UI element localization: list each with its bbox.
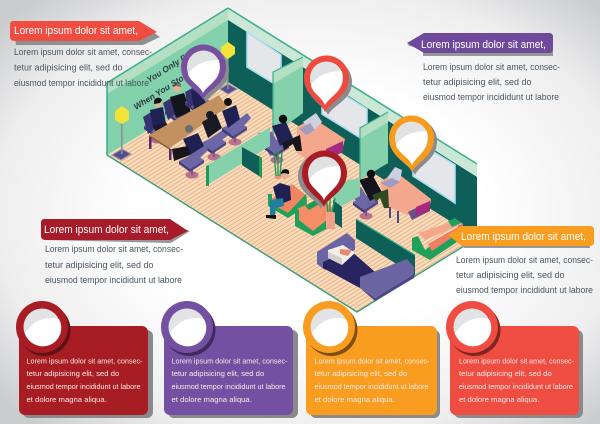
panel: dark red card	[16, 301, 153, 418]
body text: eiusmod tempor incididunt ut labore	[456, 285, 593, 295]
icon: coral ring	[446, 301, 500, 356]
card text	[26, 356, 143, 404]
card text: tetur adipisicing elit, sed do	[459, 369, 552, 378]
banner purple	[407, 33, 553, 56]
plant one	[274, 150, 282, 179]
body text: eiusmod tempor incididunt ut labore	[14, 78, 149, 88]
meeting group front row	[172, 98, 251, 178]
banner red	[10, 21, 160, 45]
callout: top left	[10, 21, 160, 88]
card text	[314, 356, 430, 404]
callout: middle right	[448, 226, 594, 295]
callout: top right	[407, 33, 560, 102]
card text: eiusmod tempor incididunt ut labore	[459, 382, 573, 391]
body text: eiusmod tempor incididunt ut labore	[45, 275, 182, 285]
banner dark red: Lorem ipsum dolor sit amet,	[44, 224, 169, 236]
body text	[45, 244, 183, 285]
partition 2	[360, 112, 388, 180]
body text: eiusmod tempor incididunt ut labore	[423, 92, 559, 102]
slanted slogan text	[132, 47, 196, 112]
desk 1 with laptop	[297, 113, 345, 163]
card text: tetur adipisicing elit, sed do	[172, 369, 264, 378]
map pin purple	[181, 45, 229, 103]
back wall	[228, 8, 477, 238]
card text: Lorem ipsum dolor sit amet, consec-	[314, 356, 430, 366]
worker chair and person 2	[347, 170, 389, 220]
card text: Lorem ipsum dolor sit amet, consec-	[459, 356, 574, 366]
armchair with seated visitor	[266, 169, 307, 219]
card text: et dolore magna aliqua.	[26, 395, 107, 404]
panel: purple card	[161, 301, 298, 418]
map pin dark red	[298, 150, 347, 209]
panel: coral card	[446, 301, 583, 418]
panel: orange card	[303, 301, 440, 418]
body text	[456, 255, 593, 295]
low partition left	[206, 127, 270, 186]
desk 2 with laptop	[380, 167, 431, 223]
body text	[14, 47, 152, 88]
floor lamp back	[220, 42, 237, 94]
floor edge	[107, 155, 477, 312]
banner red: Lorem ipsum dolor sit amet,	[14, 25, 138, 37]
coffee table with book	[328, 245, 355, 265]
body text: tetur adipisicing elit, sed do	[423, 77, 532, 87]
card text: et dolore magna aliqua.	[314, 395, 395, 404]
card text	[172, 356, 288, 404]
slanted slogan text: When You Stop	[132, 70, 190, 112]
isometric office room	[107, 8, 477, 312]
card text: tetur adipisicing elit, sed do	[314, 369, 407, 378]
body text: Lorem ipsum dolor sit amet, consec-	[423, 62, 560, 72]
card text: tetur adipisicing elit, sed do	[26, 369, 119, 378]
left wall	[107, 8, 228, 155]
map pin red	[304, 56, 352, 115]
card text: eiusmod tempor incididunt ut labore	[26, 382, 140, 391]
icon: dark red ring	[16, 301, 70, 356]
banner purple: Lorem ipsum dolor sit amet,	[421, 39, 546, 51]
slanted slogan text: You Only Fail	[145, 47, 196, 85]
card text: et dolore magna aliqua.	[459, 395, 539, 404]
card text: Lorem ipsum dolor sit amet, consec-	[172, 356, 288, 366]
banner orange	[448, 226, 594, 248]
floor lamp left	[112, 106, 131, 160]
body text: tetur adipisicing elit, sed do	[45, 260, 154, 270]
corner sofa right	[412, 218, 463, 260]
banner orange: Lorem ipsum dolor sit amet,	[461, 231, 586, 243]
lounge sofa	[317, 233, 414, 301]
body text: tetur adipisicing elit, sed do	[14, 62, 123, 72]
map pin orange	[389, 116, 437, 175]
icon: orange ring	[303, 301, 358, 356]
mint partition centre	[330, 178, 360, 228]
armchair front	[295, 196, 332, 236]
card text	[459, 356, 574, 404]
body text: Lorem ipsum dolor sit amet, consec-	[14, 47, 152, 57]
body text: Lorem ipsum dolor sit amet, consec-	[456, 255, 593, 265]
partition 1	[273, 57, 303, 135]
worker chair and person 1	[258, 115, 302, 164]
body text: tetur adipisicing elit, sed do	[456, 270, 565, 280]
callout: middle left	[41, 219, 190, 285]
icon: purple ring	[161, 301, 216, 356]
card text: Lorem ipsum dolor sit amet, consec-	[26, 356, 143, 366]
card text: eiusmod tempor incididunt ut labore	[314, 382, 428, 391]
meeting table	[149, 95, 227, 160]
card text: et dolore magna aliqua.	[172, 395, 252, 404]
meeting group back row	[143, 79, 210, 144]
windows	[247, 32, 455, 203]
banner dark red	[41, 219, 190, 243]
rear partition by sofa	[356, 219, 415, 276]
body text: Lorem ipsum dolor sit amet, consec-	[45, 244, 183, 254]
room floor	[107, 82, 477, 312]
plant two in pot	[326, 196, 335, 229]
body text	[423, 62, 560, 102]
card text: eiusmod tempor incididunt ut labore	[172, 382, 286, 391]
